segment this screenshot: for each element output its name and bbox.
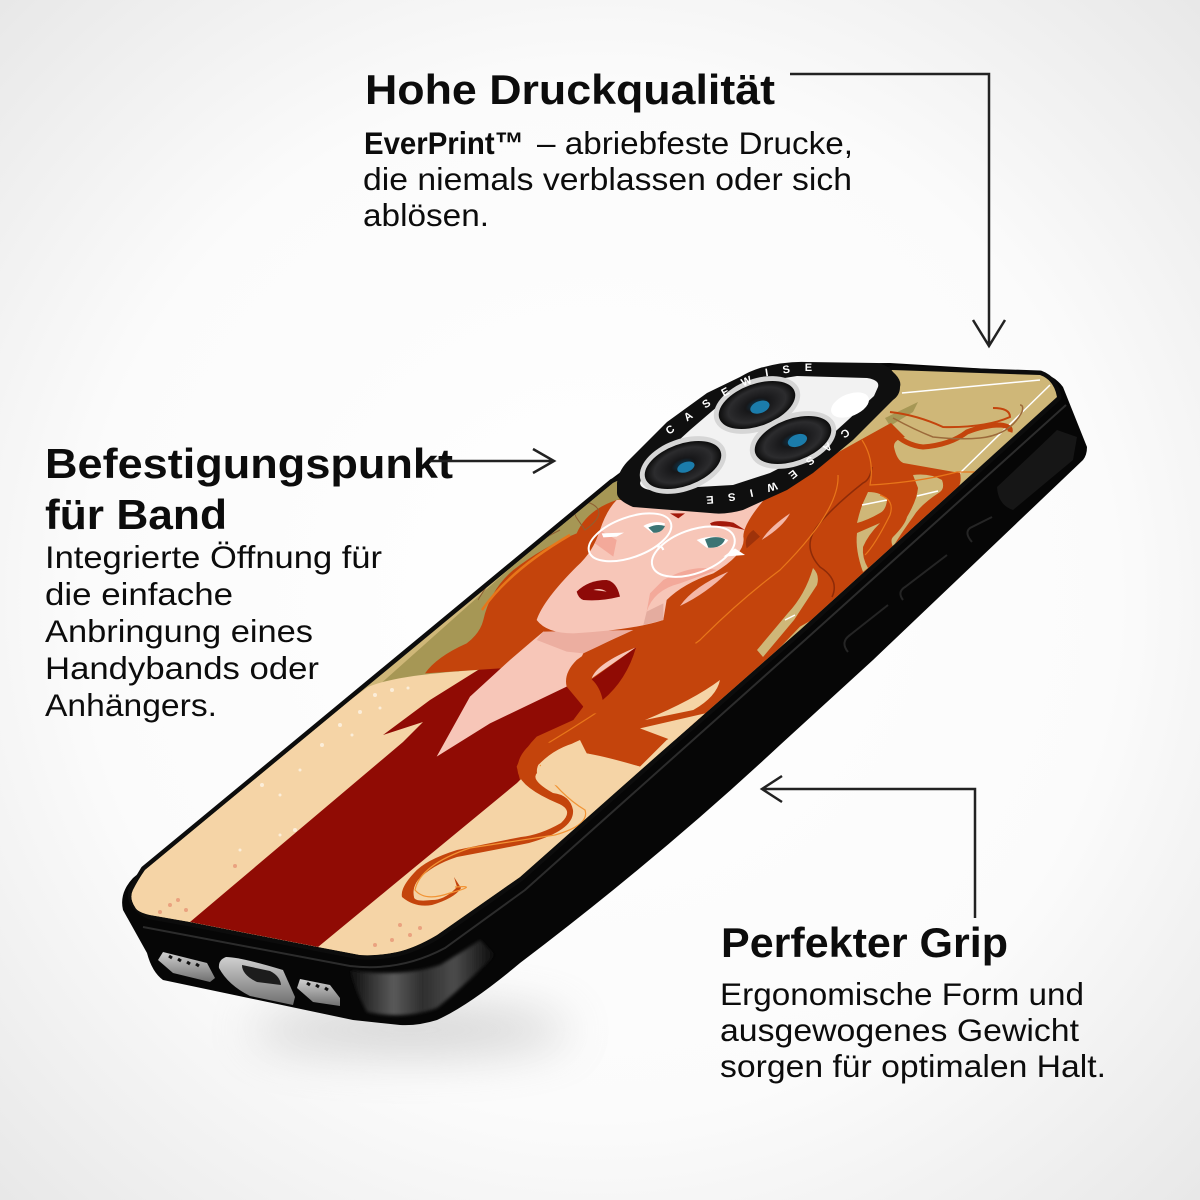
camera island bbox=[617, 362, 900, 514]
heading: Hohe Druckqualität bbox=[365, 66, 775, 113]
description: die einfache bbox=[45, 576, 233, 612]
mustard gaps in hair bbox=[757, 475, 943, 657]
description: die niemals verblassen oder sich bbox=[363, 161, 852, 197]
flash bbox=[827, 387, 873, 423]
left speaker grille bbox=[158, 952, 215, 982]
hair tail bbox=[402, 740, 573, 906]
neck shadow bbox=[537, 630, 633, 653]
eyebrows bbox=[710, 521, 745, 530]
description bbox=[720, 976, 1106, 1084]
brand text top: CASEWISE bbox=[666, 364, 812, 434]
tail highlight bbox=[415, 765, 586, 897]
description bbox=[363, 125, 853, 233]
hair bbox=[425, 423, 961, 780]
camera plate bbox=[640, 376, 878, 490]
description: ausgewogenes Gewicht bbox=[720, 1012, 1079, 1048]
hair front curl bbox=[566, 634, 696, 714]
brand text bottom: CASEWISE bbox=[706, 430, 849, 504]
lips bbox=[577, 580, 620, 600]
white background lines bbox=[902, 380, 1050, 473]
description: Anbringung eines bbox=[45, 613, 313, 649]
lens left bbox=[632, 425, 734, 505]
lens top bbox=[706, 365, 808, 445]
olive background bbox=[382, 481, 620, 682]
arrow: print quality bbox=[790, 74, 1005, 346]
description: ablösen. bbox=[363, 197, 489, 233]
description: – abriebfeste Drucke, bbox=[537, 125, 853, 161]
callout: grip bbox=[720, 919, 1106, 1084]
cheek blush bbox=[647, 568, 717, 612]
description: EverPrint™ bbox=[364, 125, 524, 161]
heading: Perfekter Grip bbox=[721, 919, 1008, 966]
description: Ergonomische Form und bbox=[720, 976, 1084, 1012]
heading bbox=[45, 440, 453, 538]
description: Anhängers. bbox=[45, 687, 217, 723]
cream gaps near hair bbox=[645, 680, 720, 720]
white lines over gaps bbox=[785, 491, 938, 620]
island frame bbox=[617, 362, 900, 514]
cream lower field bbox=[131, 670, 698, 956]
right speaker grille bbox=[297, 979, 340, 1006]
printed illustration bbox=[131, 370, 1057, 956]
heading: für Band bbox=[45, 491, 227, 538]
description bbox=[45, 539, 382, 723]
rim highlight bbox=[143, 405, 1066, 967]
neck bbox=[437, 632, 583, 757]
red dress bbox=[190, 668, 584, 947]
lens right bbox=[742, 400, 844, 480]
description: Handybands oder bbox=[45, 650, 319, 686]
mustard background bbox=[131, 370, 1057, 956]
case body bbox=[122, 363, 1087, 1025]
glasses glints bbox=[602, 533, 624, 537]
glasses bbox=[588, 512, 736, 578]
rim bbox=[132, 370, 1057, 955]
charging port bbox=[219, 957, 295, 1005]
red speckles bbox=[158, 864, 422, 947]
collar cutout bbox=[592, 647, 636, 678]
olive wedge bbox=[885, 402, 918, 426]
eyes bbox=[643, 522, 665, 533]
hair back mass bbox=[425, 423, 961, 780]
glossy corner bbox=[350, 940, 495, 1015]
side buttons bbox=[844, 517, 992, 652]
drop shadow under phone bbox=[250, 1006, 570, 1054]
hair strands on forehead bbox=[746, 530, 760, 548]
callout: print quality bbox=[363, 66, 853, 233]
hair highlights bbox=[680, 572, 728, 606]
cream speckles bbox=[238, 686, 410, 852]
heading: Befestigungspunkt bbox=[45, 440, 453, 487]
callout: strap attachment bbox=[45, 440, 453, 723]
phone case bbox=[122, 362, 1087, 1026]
description: Integrierte Öffnung für bbox=[45, 539, 382, 575]
arrow: grip bbox=[762, 776, 975, 918]
face bbox=[537, 497, 767, 633]
arrow: strap attachment bbox=[430, 449, 554, 473]
side lozenge bbox=[997, 430, 1077, 510]
hair wisps bbox=[478, 405, 1023, 745]
description: sorgen für optimalen Halt. bbox=[720, 1048, 1106, 1084]
